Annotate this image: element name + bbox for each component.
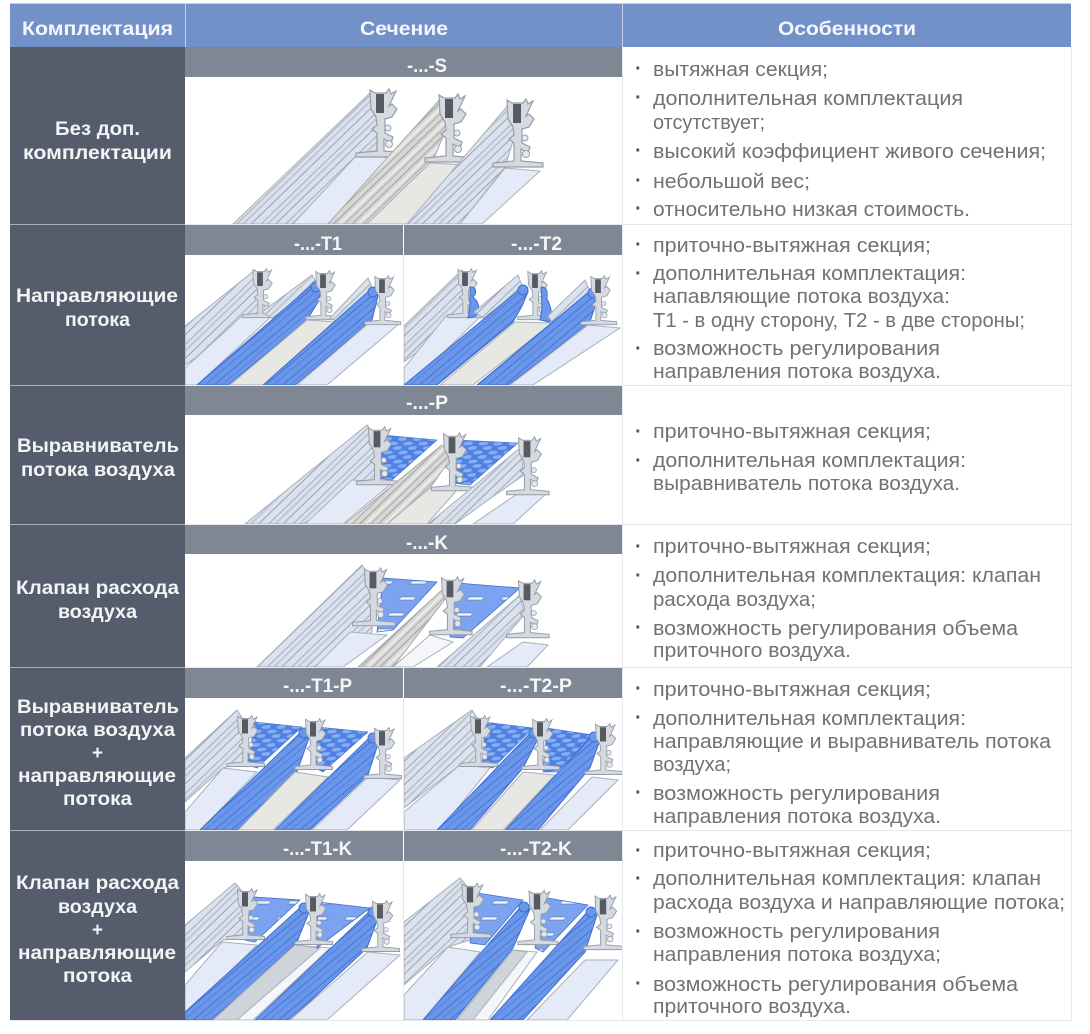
row: Выравниватель потока воздуха — [17, 386, 966, 524]
features list: дополнительная комплектация: клапан — [653, 565, 1041, 587]
section bar: T2-P — [404, 668, 622, 698]
features list: приточно-вытяжная секция; — [653, 840, 931, 862]
row label: направляющие — [18, 943, 176, 964]
features list: дополнительная комплектация: — [653, 263, 966, 285]
row label: потока — [63, 789, 132, 810]
features list: небольшой вес; — [653, 171, 810, 193]
table header — [10, 3, 1071, 47]
row label: воздуха — [58, 602, 137, 623]
features list: · — [635, 973, 642, 995]
features list: дополнительная комплектация: клапан — [653, 868, 1041, 890]
features list: · — [635, 921, 642, 943]
row label: комплектации — [23, 143, 172, 164]
row label: Клапан расхода — [16, 578, 179, 599]
row label: потока воздуха — [21, 460, 175, 481]
section bar: P — [185, 386, 622, 415]
features list: возможность регулирования — [653, 783, 940, 805]
section bar: T2-K: -...-T2-K — [500, 839, 572, 860]
features list: · — [635, 140, 642, 162]
row label: + — [92, 743, 103, 764]
diagram: S — [232, 88, 544, 224]
features list: направления потока воздуха; — [653, 944, 941, 966]
row label: потока воздуха — [20, 720, 175, 741]
features list: направляющие и выравниватель потока — [653, 731, 1052, 753]
features list — [635, 421, 966, 495]
features list: приточного воздуха. — [653, 640, 851, 662]
section bar: T2: -...-T2 — [511, 234, 562, 255]
diagram: K — [256, 564, 550, 667]
features list: · — [635, 58, 642, 80]
features list: направления потока воздуха. — [653, 806, 941, 828]
features list: приточного воздуха. — [653, 996, 851, 1018]
features list: · — [635, 678, 642, 700]
features list: · — [635, 421, 642, 443]
heading: Комплектация: Комплектация — [22, 19, 173, 40]
heading: Сечение: Сечение — [360, 19, 448, 40]
row label: потока — [65, 310, 130, 331]
row: Без доп. комплектации — [23, 47, 1046, 224]
section bar: T1-P — [185, 668, 403, 698]
features list: возможность регулирования объема — [653, 974, 1019, 996]
section bar: T2 — [404, 225, 622, 255]
features list: · — [635, 263, 642, 285]
features list: приточно-вытяжная секция; — [653, 536, 931, 558]
features list — [635, 58, 1046, 221]
features list: · — [635, 707, 642, 729]
features list: дополнительная комплектация — [653, 88, 963, 110]
features list: воздуха; — [653, 754, 731, 776]
features list: · — [635, 536, 642, 558]
features list: возможность регулирования — [653, 921, 940, 943]
row: Выравниватель + направляющие — [17, 668, 1052, 830]
features list: · — [635, 565, 642, 587]
features list: направления потока воздуха. — [653, 361, 941, 383]
diagram: T2-P — [404, 709, 622, 830]
row label: направляющие — [18, 766, 176, 787]
features list: высокий коэффициент живого сечения; — [653, 141, 1046, 163]
row label: Направляющие — [16, 286, 178, 307]
features list: расхода воздуха; — [653, 589, 816, 611]
section bar: T1-K: -...-T1-K — [283, 839, 352, 860]
features list: приточно-вытяжная секция; — [653, 421, 931, 443]
left column background — [10, 47, 185, 1020]
diagram: P — [244, 424, 550, 524]
features list: · — [635, 198, 642, 220]
section bar: S: -...-S — [407, 56, 447, 77]
diagram: T1-K — [185, 882, 401, 1020]
row label: Без доп. — [55, 119, 140, 140]
row: Направляющие потока — [16, 225, 1025, 385]
features list: Т1 - в одну сторону, Т2 - в две стороны; — [653, 310, 1025, 332]
features list — [635, 840, 1065, 1018]
section bar: T1: -...-T1 — [294, 234, 342, 255]
features list — [635, 536, 1041, 662]
features list: · — [635, 450, 642, 472]
row label: Выравниватель — [17, 436, 179, 457]
row: Клапан расхода воздуха — [16, 525, 1041, 667]
row: Клапан расхода + направляющие — [16, 831, 1065, 1020]
section bar: K — [185, 525, 622, 554]
row label: потока — [63, 966, 132, 987]
row label — [23, 119, 172, 164]
features list: · — [635, 338, 642, 360]
section bar: T2-P: -...-T2-P — [500, 676, 572, 697]
row label: + — [92, 920, 103, 941]
row label: Выравниватель — [17, 697, 179, 718]
section bar: P: -...-P — [406, 393, 448, 414]
features list: напавляющие потока воздуха: — [653, 286, 950, 308]
diagram: T2-K — [404, 877, 622, 1020]
features list: приточно-вытяжная секция; — [653, 235, 931, 257]
features list: · — [635, 170, 642, 192]
section bar: S — [185, 47, 622, 77]
features list — [635, 678, 1052, 828]
section bar: T1-K — [185, 831, 403, 861]
section bar: T1 — [185, 225, 403, 255]
diagram: T1 — [185, 268, 402, 385]
features list: расхода воздуха и направляющие потока; — [653, 892, 1065, 914]
features list: · — [635, 840, 642, 862]
features list: · — [635, 868, 642, 890]
features list: относительно низкая стоимость. — [653, 199, 970, 221]
diagram: T1-P — [185, 709, 402, 830]
heading: Особенности: Особенности — [778, 19, 916, 40]
features list: · — [635, 782, 642, 804]
features list: выравниватель потока воздуха. — [653, 473, 960, 495]
features list: возможность регулирования — [653, 338, 940, 360]
row label — [16, 286, 178, 331]
features list: · — [635, 87, 642, 109]
features list — [635, 234, 1025, 383]
features list: дополнительная комплектация: — [653, 708, 966, 730]
features list: приточно-вытяжная секция; — [653, 679, 931, 701]
features list: возможность регулирования объема — [653, 618, 1019, 640]
row label — [16, 873, 179, 987]
features list: дополнительная комплектация: — [653, 450, 966, 472]
features list: отсутствует; — [653, 112, 765, 134]
section bar: T2-K — [404, 831, 622, 861]
features list: · — [635, 617, 642, 639]
section bar: K: -...-K — [406, 533, 448, 554]
row label — [16, 578, 179, 623]
features list: вытяжная секция; — [653, 59, 828, 81]
row label — [17, 697, 179, 810]
section bar: T1-P: -...-T1-P — [283, 676, 352, 697]
row label: воздуха — [58, 897, 137, 918]
diagram: T2 — [404, 268, 622, 385]
features list: · — [635, 234, 642, 256]
row label — [17, 436, 179, 481]
row label: Клапан расхода — [16, 873, 179, 894]
